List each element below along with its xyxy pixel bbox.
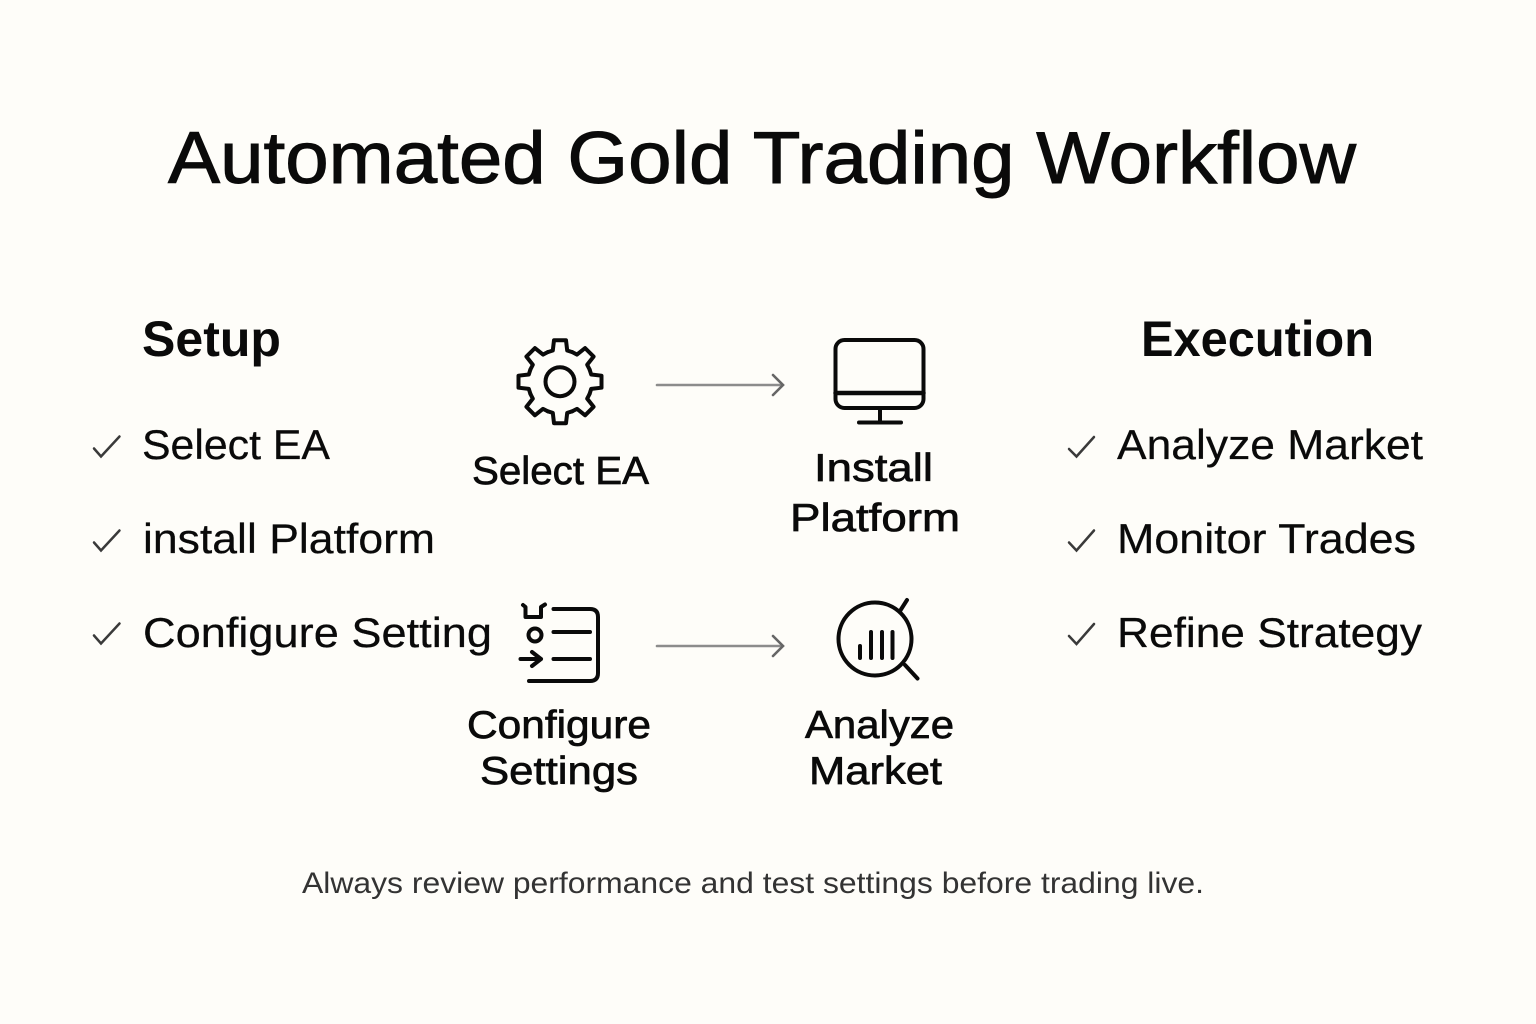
list item: monitor trades: Monitor Trades (1117, 515, 1416, 562)
heading: execution: Execution (1141, 311, 1374, 367)
label: analyze market (805, 704, 954, 793)
footer note: Always review performance and test settings before trading live. (302, 867, 1204, 900)
heading: setup: Setup (142, 311, 281, 367)
label: configure settings (467, 704, 651, 793)
label: analyze market: Market (809, 750, 942, 793)
panel: execution checklist (1069, 311, 1423, 656)
list item: configure setting: Configure Setting (143, 609, 492, 656)
label: install platform: Install (814, 447, 933, 490)
list item: refine strategy: Refine Strategy (1117, 609, 1422, 656)
panel: setup checklist (94, 311, 492, 656)
label: configure settings: Settings (480, 750, 638, 793)
icon: monitor (836, 340, 924, 422)
title: Automated Gold Trading Workflow (168, 118, 1356, 199)
step: configure settings (467, 604, 651, 793)
label: analyze market: Analyze (805, 704, 954, 747)
list item: analyze market: Analyze Market (1117, 421, 1423, 468)
icon: magnifier with bars (838, 600, 918, 678)
step: select EA (472, 340, 649, 493)
step: analyze market (805, 600, 954, 793)
arrow: configure settings to analyze market (657, 636, 783, 656)
label: install platform (790, 447, 960, 540)
list item: install platform: install Platform (143, 515, 435, 562)
label: configure settings: Configure (467, 704, 651, 747)
label: install platform: Platform (790, 497, 960, 540)
step: install platform (790, 340, 960, 540)
icon: settings list (520, 604, 598, 681)
label: select EA: Select EA (472, 450, 649, 493)
arrow: select EA to install platform (657, 375, 783, 395)
icon: gear (518, 340, 602, 423)
list item: select EA: Select EA (142, 421, 330, 468)
